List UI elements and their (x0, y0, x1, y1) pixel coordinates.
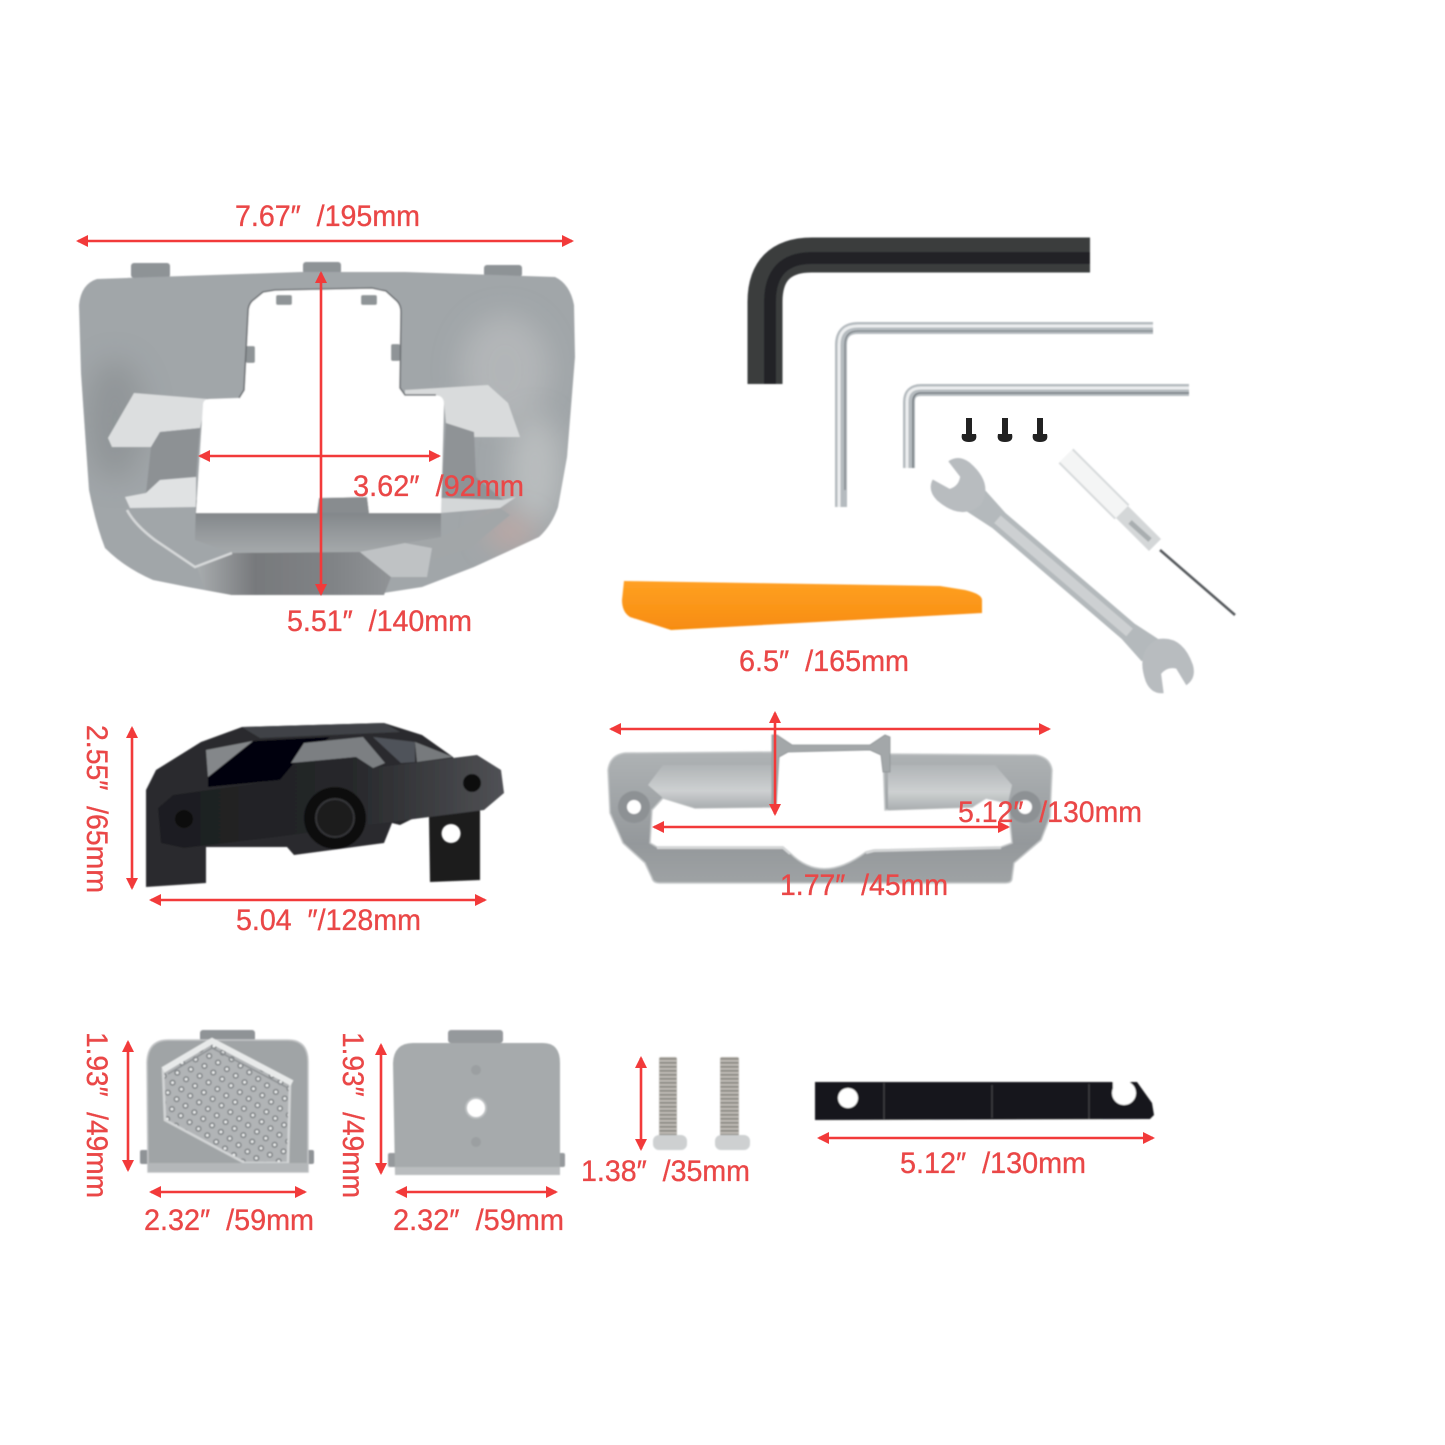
part: silver frame (608, 735, 1052, 883)
arrow: bracket height (131, 728, 133, 888)
left inner wall (648, 765, 772, 808)
clip plate (147, 1040, 308, 1172)
window rim tabs (246, 295, 400, 363)
bezel lower recess (195, 500, 441, 553)
label: bar 5.12 in: 5.12″ /130mm (900, 1147, 1086, 1180)
label: clip 2.32 in: 2.32″ /59mm (144, 1204, 314, 1237)
clip plate (393, 1043, 560, 1175)
label: clip 1.93 in vertical: 1.93″ /49mm (80, 1032, 113, 1198)
left light facets (108, 393, 207, 447)
tool: wrench (918, 444, 1216, 714)
arrow: bezel height (320, 273, 322, 594)
bezel body (79, 272, 575, 595)
arrow: plain clip width (397, 1191, 556, 1193)
window opening (196, 288, 444, 513)
arrow: bolt length (640, 1058, 642, 1149)
arrow: link bar width (819, 1137, 1153, 1139)
arrow: bracket width (151, 899, 485, 901)
dimension arrows (78, 241, 1153, 1192)
hexagon grid (163, 1042, 290, 1163)
part: black link bar (815, 1080, 1154, 1120)
bezel edge highlight (127, 510, 232, 567)
inner gray facets (206, 741, 253, 777)
arrow: clip width (151, 1191, 305, 1193)
right inner wall (888, 765, 1012, 810)
center tab (772, 735, 890, 807)
part: two bolts (653, 1057, 750, 1150)
rivets (175, 810, 193, 828)
tool: black hex key (765, 255, 1090, 384)
right leg (429, 808, 480, 882)
label: 1.77 in: 1.77″ /45mm (780, 869, 948, 902)
label: 7.67 in: 7.67″ /195mm (235, 200, 420, 233)
top bevel (242, 723, 400, 738)
bezel shading (85, 315, 563, 544)
clip center hole (466, 1098, 486, 1118)
right light facets (405, 385, 520, 437)
clip tabs (388, 1030, 565, 1167)
lower bar highlight (657, 848, 1001, 854)
arrow: frame height (774, 713, 776, 814)
part: plain clip (388, 1030, 565, 1175)
arrow: frame width (611, 728, 1049, 730)
frame plate (608, 752, 1052, 883)
arrow: frame inner width (654, 826, 1008, 828)
label: 2.55 in vertical: 2.55″ /65mm (80, 725, 113, 893)
dimension labels (80, 200, 1142, 1237)
bottom lip (148, 1163, 308, 1172)
window bottom tab (319, 497, 369, 513)
label: plain clip 2.32 in: 2.32″ /59mm (393, 1204, 564, 1237)
tool: screwdriver (1066, 456, 1235, 615)
lower right facet (360, 543, 432, 577)
tool: torx key (839, 326, 1153, 507)
window outline (239, 288, 436, 398)
tool: small hex key (907, 388, 1189, 468)
tool: orange pry wedge (622, 581, 982, 630)
arrow: bezel window width (200, 455, 439, 457)
label: 3.62 in: 3.62″ /92mm (353, 470, 524, 503)
small black screws (962, 418, 1047, 442)
inner black cavity (208, 737, 330, 787)
label: frame 5.12 in: 5.12″ /130mm (958, 796, 1142, 829)
bottom lip (395, 1167, 560, 1175)
hexagon bevel (163, 1041, 292, 1083)
lower front band (197, 552, 391, 595)
label: 5.51 in: 5.51″ /140mm (287, 605, 472, 638)
part: main silver bezel (79, 262, 575, 595)
bracket body (146, 723, 470, 887)
label: 1.38 in: 1.38″ /35mm (581, 1155, 750, 1188)
top clips (131, 262, 522, 278)
label: 6.5 in: 6.5″ /165mm (739, 645, 909, 678)
part: perforated clip (140, 1030, 314, 1172)
label: plain clip 1.93 in vertical: 1.93″ /49mm (336, 1032, 369, 1198)
arrow: clip height (127, 1042, 129, 1170)
arrow: plain clip height (380, 1045, 382, 1173)
part: black bracket (146, 723, 504, 887)
screw holes (618, 791, 1041, 823)
label: 5.04 in: 5.04 ″/128mm (236, 904, 421, 937)
center bolt (304, 787, 366, 849)
parts dimension sheet (76, 204, 1236, 1230)
bolt 1 (653, 1057, 687, 1150)
clip bumps (471, 1065, 481, 1147)
clip tabs (140, 1030, 314, 1164)
arrow: bezel width (78, 240, 572, 242)
bolt 2 (715, 1057, 750, 1150)
strap plate (158, 755, 504, 848)
